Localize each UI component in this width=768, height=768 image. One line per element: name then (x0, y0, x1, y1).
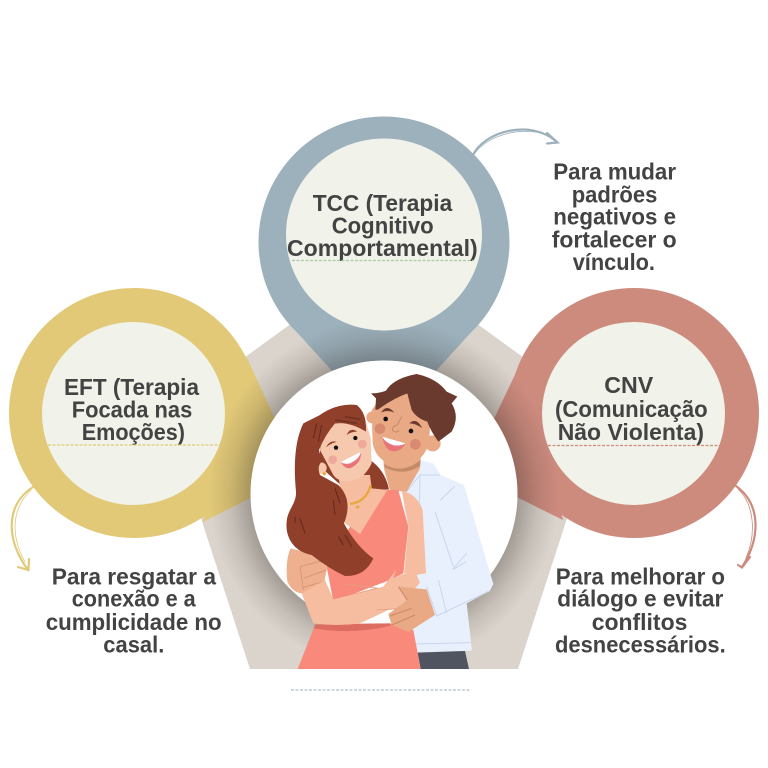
EFT inner circle (42, 322, 225, 505)
panel: CNV (542, 322, 725, 505)
CNV inner circle (542, 322, 725, 505)
woman front hair (286, 405, 373, 576)
CNV heading: CNV (604, 372, 654, 398)
panel: TCC (286, 138, 482, 330)
EFT heading (64, 374, 200, 445)
woman chest and neck (338, 475, 388, 534)
TCC heading: Cognitivo (332, 212, 434, 238)
text: CNV description: Para melhorar o (556, 563, 725, 589)
CNV heading: (Comunicação (555, 396, 708, 422)
TCC heading: TCC (Terapia (313, 190, 453, 216)
man trousers (418, 651, 469, 669)
text: CNV description (555, 563, 726, 658)
EFT heading: Focada nas (72, 396, 192, 422)
text: EFT description: Para resgatar a (52, 563, 217, 589)
TCC teardrop ring (258, 116, 510, 428)
man head (372, 387, 431, 467)
man ears (366, 411, 378, 423)
man hair (371, 374, 457, 442)
text: TCC description: negativos e (553, 204, 676, 230)
man shirt (403, 460, 493, 652)
TCC heading: Comportamental) (287, 235, 478, 261)
arrow: TCC to text (473, 129, 558, 155)
EFT heading: EFT (Terapia (64, 374, 200, 400)
man right hand (388, 587, 435, 632)
text: TCC description (552, 158, 677, 275)
arrow: CNV to text (736, 486, 756, 568)
woman back hair (320, 405, 389, 493)
text: EFT description (46, 563, 222, 658)
TCC inner circle (286, 138, 482, 330)
text: EFT description: conexão e a (72, 586, 197, 612)
text: TCC description: padrões (572, 181, 657, 207)
panel: EFT (42, 322, 225, 505)
center circle shadow (217, 329, 550, 642)
woman dress (327, 490, 408, 602)
man neck (383, 458, 421, 492)
text: EFT description: cumplicidade no (46, 609, 222, 635)
arrow: EFT to text (12, 487, 33, 570)
EFT teardrop ring (9, 288, 300, 538)
TCC heading (287, 190, 478, 261)
CNV heading: Não Violenta) (558, 419, 704, 445)
illustration: couple (286, 374, 493, 669)
text: TCC description: vínculo. (573, 249, 655, 275)
woman lower arm (302, 570, 420, 625)
woman face (320, 422, 372, 481)
text: CNV description: conflitos (592, 609, 687, 635)
text: CNV description: desnecessários. (555, 632, 726, 658)
woman shoulder arm (402, 491, 426, 575)
CNV teardrop ring (468, 288, 759, 538)
EFT heading: Emoções) (82, 419, 185, 445)
center white circle (250, 360, 518, 628)
text: EFT description: casal. (103, 632, 164, 658)
man face (375, 408, 422, 451)
CNV heading (555, 372, 708, 445)
text: TCC description: fortalecer o (552, 227, 677, 253)
text: TCC description: Para mudar (553, 158, 676, 184)
text: CNV description: diálogo e evitar (557, 586, 723, 612)
man left hand (287, 548, 327, 594)
background pentagon (167, 256, 601, 669)
